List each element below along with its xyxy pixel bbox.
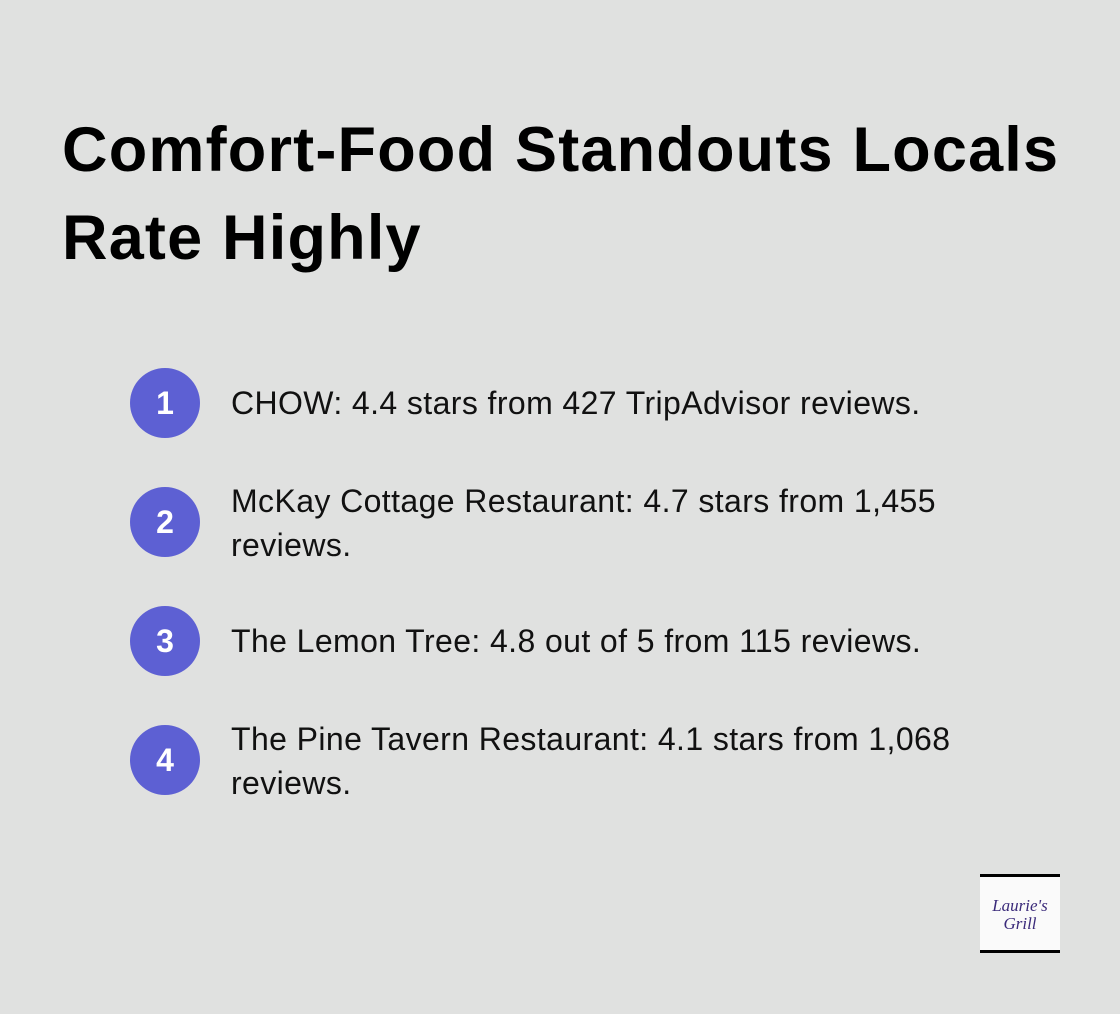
logo: Laurie's: [992, 896, 1048, 915]
item 2: McKay Cottage Restaurant: 4.7 stars from 1,455: [231, 483, 936, 519]
item 3: The Lemon Tree: 4.8 out of 5 from 115 reviews.: [231, 623, 921, 659]
title: Rate Highly: [62, 203, 422, 273]
item 2: 2: [156, 504, 174, 540]
title: [62, 115, 1059, 273]
item 4: 4: [156, 742, 174, 778]
item 3: [130, 606, 921, 676]
logo: Grill: [1003, 914, 1037, 933]
item 2: reviews.: [231, 527, 352, 563]
item 4: The Pine Tavern Restaurant: 4.1 stars from 1,068: [231, 721, 950, 757]
item 4: reviews.: [231, 765, 352, 801]
item 3: 3: [156, 623, 174, 659]
item 1: CHOW: 4.4 stars from 427 TripAdvisor reviews.: [231, 385, 921, 421]
item 1: [130, 368, 921, 438]
item 2: [130, 483, 936, 563]
title: Comfort-Food Standouts Locals: [62, 115, 1059, 185]
logo: [980, 874, 1060, 953]
item 1: 1: [156, 385, 174, 421]
item 4: [130, 721, 950, 801]
